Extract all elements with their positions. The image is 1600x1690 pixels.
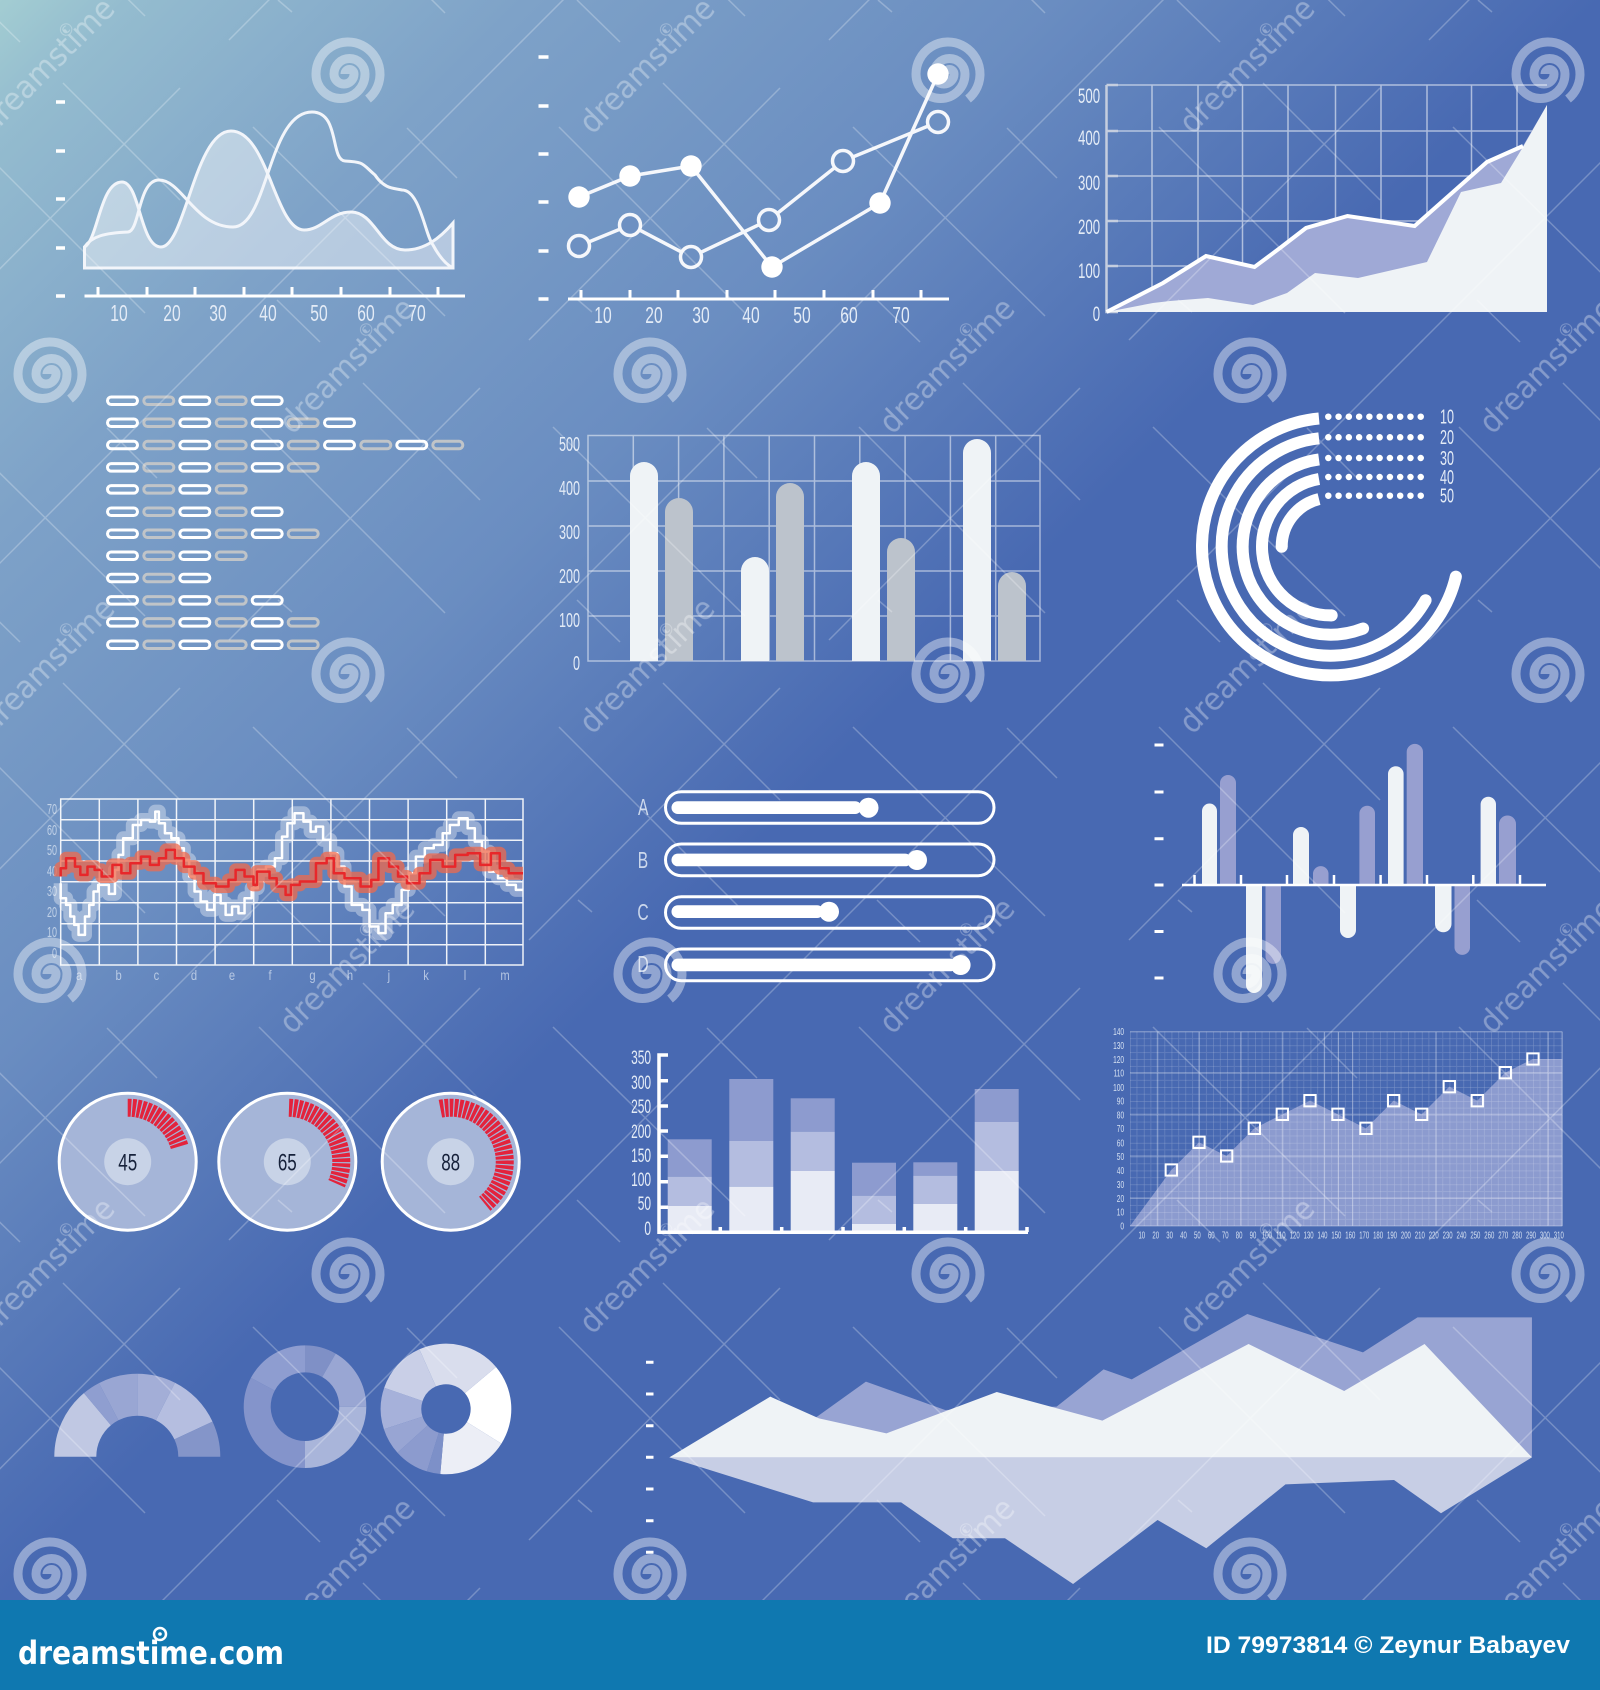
watermark: dreamstime xyxy=(272,1491,422,1641)
x labels: b xyxy=(115,968,122,983)
watermark: dreamstime xyxy=(1172,591,1322,741)
white area xyxy=(669,1344,1532,1457)
bar segments: top xyxy=(668,1079,1019,1196)
y labels: 500 xyxy=(559,433,580,456)
gauge: 88 xyxy=(382,1093,519,1230)
x labels: 180 xyxy=(1373,1230,1383,1241)
x axis xyxy=(568,290,949,299)
watermark: © xyxy=(54,1217,80,1243)
chart: rounded bar chart xyxy=(559,433,1040,675)
x labels: c xyxy=(154,968,159,983)
y labels: 90 xyxy=(1117,1095,1124,1107)
watermark: © xyxy=(354,317,380,343)
y labels: 50 xyxy=(638,1194,651,1215)
x labels: 130 xyxy=(1304,1230,1314,1241)
x labels: 90 xyxy=(1250,1230,1257,1241)
axis xyxy=(1182,875,1546,885)
row 11 xyxy=(108,619,318,626)
x labels: 200 xyxy=(1401,1230,1411,1241)
y labels: 400 xyxy=(559,477,580,500)
labels: 10 xyxy=(1440,406,1454,428)
highlighted grid lines xyxy=(1130,1032,1562,1226)
y labels: 0 xyxy=(573,652,580,675)
slider A xyxy=(638,792,994,823)
y labels: 300 xyxy=(559,521,580,544)
x labels: 40 xyxy=(1180,1230,1187,1241)
x labels: 20 xyxy=(163,301,181,327)
y labels: 100 xyxy=(559,609,580,632)
y labels: 250 xyxy=(631,1097,651,1118)
x labels xyxy=(76,968,510,983)
y labels: 50 xyxy=(47,842,57,859)
donut: small hole xyxy=(381,1344,511,1474)
x labels: 20 xyxy=(1152,1230,1159,1241)
x labels: 50 xyxy=(1194,1230,1201,1241)
row 7 xyxy=(108,530,318,538)
x labels: 70 xyxy=(408,301,426,327)
y labels: 120 xyxy=(1113,1054,1124,1065)
x labels: 50 xyxy=(793,303,811,329)
x labels: 10 xyxy=(1138,1230,1145,1241)
white line xyxy=(1106,146,1523,312)
y labels: 40 xyxy=(47,863,57,880)
watermark: © xyxy=(1554,317,1580,343)
y labels: 100 xyxy=(1113,1082,1124,1093)
y labels: 110 xyxy=(1114,1067,1124,1079)
x labels: e xyxy=(229,968,235,983)
x labels xyxy=(110,301,426,327)
row 6 xyxy=(108,508,282,516)
x labels: 60 xyxy=(357,301,375,327)
grid xyxy=(1130,1032,1562,1226)
x labels: 260 xyxy=(1484,1230,1495,1241)
watermark: © xyxy=(1254,617,1280,643)
bar segments: middle xyxy=(668,1122,1019,1224)
y labels: 20 xyxy=(1117,1193,1124,1204)
y labels: 350 xyxy=(631,1048,651,1069)
x labels: 280 xyxy=(1512,1230,1522,1241)
y labels: 0 xyxy=(52,945,57,962)
axis xyxy=(1106,85,1118,312)
x labels xyxy=(594,303,910,329)
chart: mirrored area xyxy=(646,1314,1532,1584)
x labels: 210 xyxy=(1415,1230,1425,1241)
y labels xyxy=(1078,84,1100,326)
slider D xyxy=(637,949,994,981)
x labels: 100 xyxy=(1262,1230,1272,1241)
watermark: © xyxy=(1554,917,1580,943)
gauge: 65 xyxy=(219,1093,356,1230)
x labels: 310 xyxy=(1554,1230,1564,1241)
watermark: © xyxy=(354,1517,380,1543)
x labels: 40 xyxy=(259,301,277,327)
slider B: B xyxy=(638,848,648,874)
x labels: 70 xyxy=(1222,1230,1229,1241)
outline curve xyxy=(84,112,453,268)
footer logo: dreamstime.com xyxy=(18,1634,284,1672)
y labels: 200 xyxy=(631,1122,651,1143)
x labels: 60 xyxy=(1208,1230,1215,1241)
row 4 xyxy=(108,464,318,471)
bar segments: bottom xyxy=(668,1171,1019,1231)
x labels: j xyxy=(387,968,390,983)
area xyxy=(1130,1059,1562,1226)
half donut xyxy=(54,1374,220,1457)
chart: smooth area curves xyxy=(56,102,465,327)
y labels: 60 xyxy=(47,822,57,839)
chart: stacked bars xyxy=(631,1048,1028,1240)
x labels: 40 xyxy=(742,303,760,329)
x labels: 220 xyxy=(1429,1230,1439,1241)
x labels: 170 xyxy=(1359,1230,1369,1241)
watermark: dreamstime xyxy=(1172,1191,1322,1341)
y labels: 30 xyxy=(1117,1179,1124,1190)
y ticks xyxy=(538,57,548,299)
chart: pill rows xyxy=(108,397,463,648)
y labels xyxy=(47,801,57,962)
purple bars xyxy=(1220,744,1516,964)
x labels: 30 xyxy=(1166,1230,1173,1241)
labels: 20 xyxy=(1440,426,1454,449)
y labels: 50 xyxy=(1117,1151,1124,1162)
y labels xyxy=(559,433,580,675)
y labels xyxy=(631,1048,651,1240)
chart: area with square markers xyxy=(1113,1026,1564,1241)
gauge: 45: 45 xyxy=(118,1150,137,1176)
square markers xyxy=(1166,1053,1539,1176)
y labels: 0 xyxy=(644,1219,651,1240)
y labels: 200 xyxy=(1078,215,1100,239)
purple area xyxy=(669,1314,1532,1457)
chart: line chart with dots xyxy=(538,57,949,329)
x labels: 20 xyxy=(645,303,663,329)
gauge: 88: 88 xyxy=(441,1150,460,1176)
slider C: C xyxy=(637,900,649,926)
y labels: 100 xyxy=(631,1170,651,1191)
y labels: 40 xyxy=(1117,1165,1124,1176)
y labels: 20 xyxy=(47,904,57,921)
y labels: 500 xyxy=(1078,84,1100,108)
x labels: 230 xyxy=(1443,1230,1453,1241)
y labels: 70 xyxy=(1117,1123,1124,1134)
chart: concentric arcs xyxy=(1202,406,1462,675)
x labels: d xyxy=(191,968,197,983)
donut: medium hole xyxy=(244,1345,366,1468)
y ticks xyxy=(56,102,65,296)
grid xyxy=(61,799,523,965)
watermark: © xyxy=(954,917,980,943)
y labels: 0 xyxy=(1093,302,1100,326)
x labels: 120 xyxy=(1290,1230,1300,1241)
labels: 30 xyxy=(1440,447,1454,470)
y labels xyxy=(1113,1026,1124,1232)
axes xyxy=(659,1055,1028,1232)
y labels: 60 xyxy=(1117,1137,1124,1149)
y labels: 100 xyxy=(1078,259,1100,283)
watermark: dreamstime xyxy=(872,1491,1022,1641)
x labels: 70 xyxy=(892,303,910,329)
watermark: © xyxy=(954,317,980,343)
y labels: 300 xyxy=(631,1073,651,1094)
white area xyxy=(1106,105,1547,312)
x labels: 60 xyxy=(840,303,858,329)
chart: area with grid xyxy=(1078,84,1547,326)
row 9 xyxy=(108,574,210,582)
series: open dots xyxy=(568,112,948,268)
watermark: dreamstime xyxy=(572,1191,722,1341)
row 3 xyxy=(108,441,463,449)
watermark: dreamstime xyxy=(272,291,422,441)
footer bar xyxy=(0,1600,1600,1690)
watermark: © xyxy=(1254,1217,1280,1243)
x labels: 160 xyxy=(1345,1230,1356,1241)
row 12 xyxy=(108,641,318,648)
y labels: 130 xyxy=(1113,1040,1124,1051)
watermark: © xyxy=(354,917,380,943)
row 10 xyxy=(108,597,282,604)
chart: sliders A to D xyxy=(637,792,994,981)
x labels: 110 xyxy=(1276,1230,1286,1241)
purple area xyxy=(1106,105,1547,312)
watermark: © xyxy=(654,1217,680,1243)
x labels: g xyxy=(309,968,316,983)
watermark: © xyxy=(1554,1517,1580,1543)
watermark: dreamstime xyxy=(872,291,1022,441)
x labels: 250 xyxy=(1470,1230,1481,1241)
x labels: l xyxy=(464,968,466,983)
x labels: 270 xyxy=(1498,1230,1508,1241)
row 8 xyxy=(108,552,246,560)
arc end caps xyxy=(1276,541,1462,634)
row 2 xyxy=(108,419,354,426)
grid xyxy=(1106,85,1547,312)
watermark: © xyxy=(1254,17,1280,43)
x labels: 300 xyxy=(1540,1230,1550,1241)
lower area xyxy=(669,1457,1532,1584)
gauge: 45 xyxy=(59,1093,196,1230)
y labels: 30 xyxy=(47,883,57,900)
labels xyxy=(1440,406,1454,507)
x labels: 240 xyxy=(1456,1230,1467,1241)
arcs xyxy=(1202,419,1456,675)
y labels: 10 xyxy=(47,924,57,941)
watermark: © xyxy=(54,17,80,43)
white bars xyxy=(1202,766,1496,993)
grey bars xyxy=(665,483,1026,661)
white series xyxy=(61,812,523,935)
x labels: 80 xyxy=(1236,1230,1243,1241)
footer credit: ID 79973814 © Zeynur Babayev xyxy=(1206,1632,1571,1659)
red series xyxy=(61,850,523,895)
y labels: 150 xyxy=(631,1146,651,1167)
x labels xyxy=(1138,1230,1564,1241)
x labels: 10 xyxy=(110,301,128,327)
x labels: a xyxy=(76,968,83,983)
chart: diverging bars xyxy=(1154,744,1546,993)
dotted leaders xyxy=(1328,417,1431,496)
x labels: 30 xyxy=(692,303,710,329)
x labels: k xyxy=(423,968,429,983)
y labels: 0 xyxy=(1120,1220,1124,1232)
x labels: 140 xyxy=(1317,1230,1328,1241)
watermark: dreamstime xyxy=(272,891,422,1041)
y labels: 80 xyxy=(1117,1109,1124,1121)
slider A: A xyxy=(638,795,649,821)
x labels: 10 xyxy=(594,303,612,329)
series: filled dots xyxy=(568,63,949,278)
x labels: 150 xyxy=(1331,1230,1342,1241)
y labels: 200 xyxy=(559,565,580,588)
slider B xyxy=(638,844,994,876)
x labels: f xyxy=(268,968,272,983)
labels: 50 xyxy=(1440,485,1454,507)
watermark: © xyxy=(954,1517,980,1543)
x labels: m xyxy=(500,968,510,983)
y labels: 70 xyxy=(47,801,57,818)
grid xyxy=(588,436,1040,661)
slider C xyxy=(637,897,994,928)
x axis xyxy=(84,287,465,296)
watermark: dreamstime xyxy=(572,591,722,741)
watermark: dreamstime xyxy=(872,891,1022,1041)
watermark: © xyxy=(54,617,80,643)
y labels: 140 xyxy=(1113,1026,1124,1037)
chart: stepped signal lines xyxy=(47,799,523,983)
gauge: 65: 65 xyxy=(278,1150,297,1176)
watermark: © xyxy=(654,617,680,643)
x labels: h xyxy=(347,968,353,983)
slider D: D xyxy=(637,952,649,978)
labels: 40 xyxy=(1440,466,1454,489)
y ticks xyxy=(646,1362,654,1552)
y ticks xyxy=(1154,745,1164,978)
y labels: 400 xyxy=(1078,126,1100,150)
filled curve xyxy=(84,131,453,268)
watermark: © xyxy=(654,17,680,43)
y labels: 10 xyxy=(1117,1206,1124,1218)
x labels: 190 xyxy=(1387,1230,1397,1241)
x labels: 50 xyxy=(310,301,328,327)
x labels: 290 xyxy=(1526,1230,1536,1241)
y labels: 300 xyxy=(1078,171,1100,195)
row 1 xyxy=(108,397,282,404)
white bars xyxy=(630,439,991,661)
x labels: 30 xyxy=(209,301,227,327)
row 5 xyxy=(108,486,246,493)
